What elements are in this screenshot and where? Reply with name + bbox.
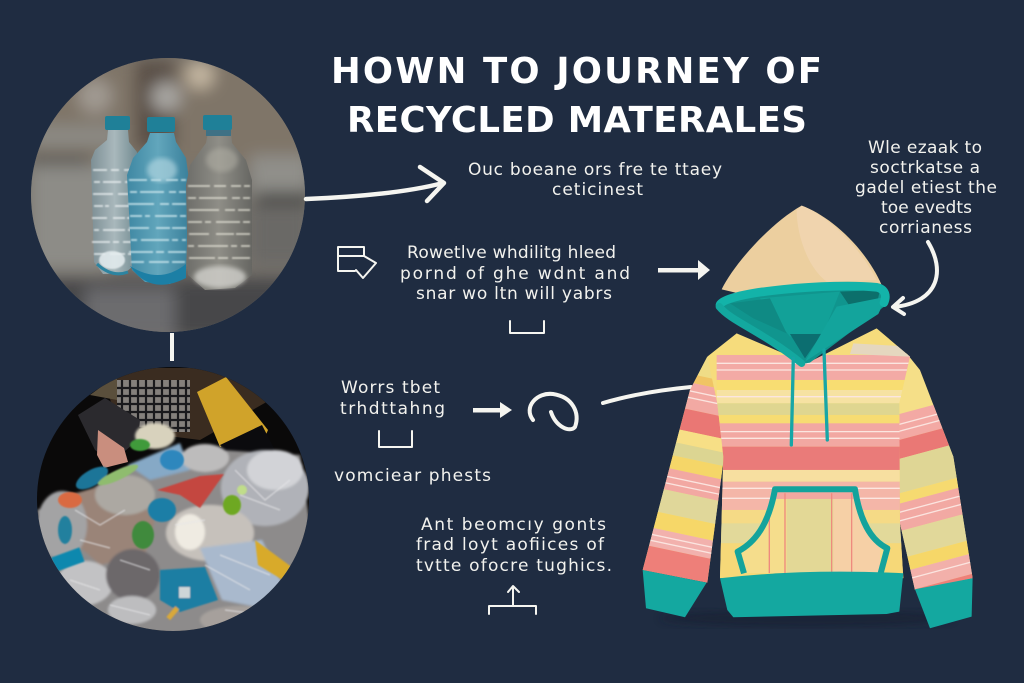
bottle: right [186,115,252,290]
icon: bracket one [510,321,544,333]
text: fifth step: Ant beomcıy gonts [421,515,606,535]
text: second step: pornd of ghe wdnt and [400,264,630,284]
bottle: left [91,116,138,274]
arrow: loop to hoodie [603,387,691,403]
text: right caption: soctrkatse a [870,158,980,178]
icon: tag card [338,247,376,278]
photo: pile of plastic waste [35,365,315,635]
text: fifth step: tvtte ofocre tughics. [416,556,612,576]
text: top caption: Ouc boeane ors fre te ttaey [468,160,722,180]
title: RECYCLED MATERALES [347,100,807,141]
text: right caption: toe evedts [881,198,972,218]
waistband and cuffs [643,570,973,628]
text: right caption [855,138,997,238]
text: third step: trhdttahng [340,399,445,419]
text: fifth step: frad loyt aofiices of [416,535,605,555]
photo: three plastic bottles [30,58,310,338]
title: HOWN TO JOURNEY OF [331,51,822,92]
text: top caption [468,160,722,200]
right sleeve [899,354,973,590]
icon: bracket two [379,431,412,447]
torso stripes [703,327,917,583]
icon: up arrow bracket [489,586,536,614]
title [331,51,822,141]
text: third step: Worrs tbet [341,378,440,398]
icon: loop [530,394,577,429]
hood outer [722,206,882,300]
text: fifth step [416,515,612,576]
arrow: bottles to caption [306,167,444,201]
bottle: middle [127,117,189,285]
connector between photos [170,333,174,361]
text: second step: snar wo ltn will yabrs [416,284,612,304]
text: third step [340,378,445,419]
hood brim [720,286,885,305]
left sleeve [642,356,724,583]
arrow: to hood [658,260,710,280]
hood lining [716,284,888,364]
drawstrings [791,350,827,445]
text: right caption: Wle ezaak to [868,138,982,158]
text: second step: Rowetlve whdilitg hleed [407,243,616,263]
arrow: to loop [473,402,512,418]
text: second step [400,243,630,304]
pocket [737,487,890,577]
hoodie [642,206,973,628]
arrow: curved to hood [893,242,937,314]
text: right caption: gadel etiest the [855,178,997,198]
text: fourth step label: vomciear phests [334,466,491,486]
text: right caption: corrianess [879,218,972,238]
text: top caption: ceticinest [552,180,643,200]
